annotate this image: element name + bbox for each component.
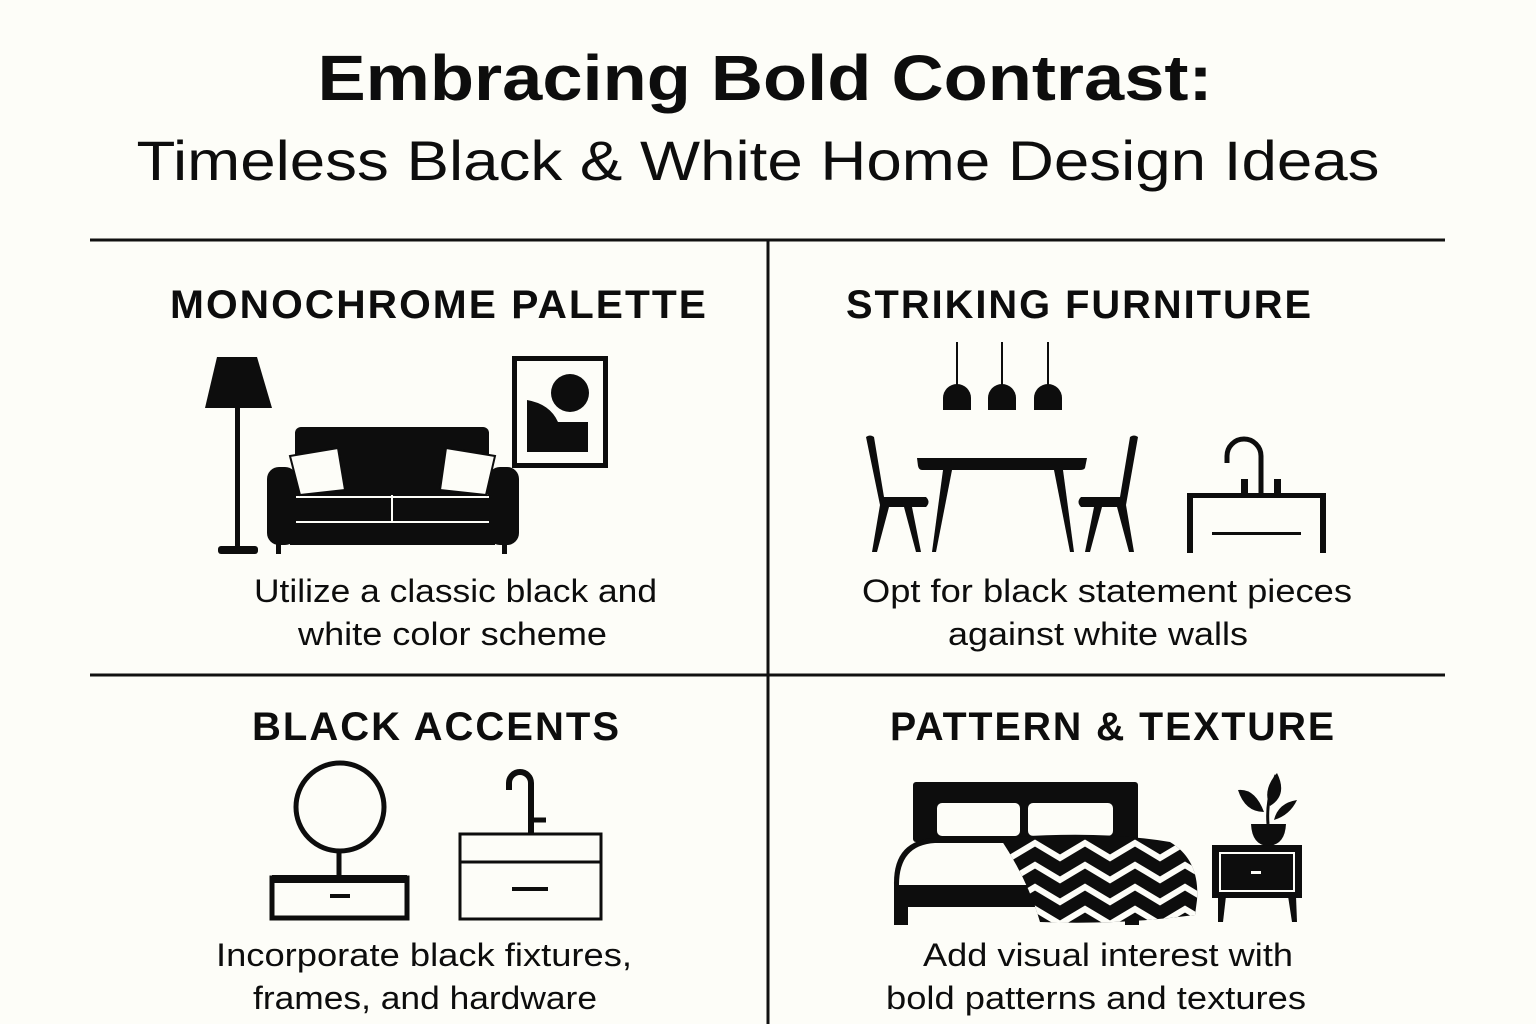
- text: pattern & texture: Add visual interest with: [923, 937, 1293, 973]
- panel: striking furniture: [846, 283, 1352, 652]
- text: black accents: frames, and hardware: [253, 980, 597, 1016]
- text: black accents: Incorporate black fixtures,: [216, 937, 632, 973]
- icon: living room: [205, 357, 606, 554]
- heading: monochrome palette: MONOCHROME PALETTE: [170, 283, 708, 327]
- heading: pattern & texture: PATTERN & TEXTURE: [890, 705, 1336, 749]
- text: striking furniture: [862, 573, 1352, 652]
- text: monochrome: white color scheme: [297, 616, 607, 652]
- text: black accents: [216, 937, 632, 1016]
- panel: pattern & texture: [886, 705, 1336, 1016]
- text: striking furniture: against white walls: [948, 616, 1248, 652]
- title: Embracing Bold Contrast:: [318, 42, 1212, 114]
- panel: monochrome palette: [170, 283, 708, 652]
- icon: bed and nightstand: [894, 773, 1302, 925]
- title: Timeless Black & White Home Design Ideas: [136, 129, 1380, 192]
- text: monochrome: [254, 573, 657, 652]
- panel: black accents: [216, 705, 632, 1016]
- title: [136, 42, 1380, 192]
- text: pattern & texture: bold patterns and textures: [886, 980, 1306, 1016]
- text: striking furniture: Opt for black statement pieces: [862, 573, 1352, 609]
- heading: black accents: BLACK ACCENTS: [252, 705, 621, 749]
- text: pattern & texture: [886, 937, 1306, 1016]
- icon: dining set: [866, 342, 1326, 553]
- text: monochrome: Utilize a classic black and: [254, 573, 657, 609]
- heading: striking furniture: STRIKING FURNITURE: [846, 283, 1313, 327]
- icon: mirror and vanity: [272, 763, 601, 919]
